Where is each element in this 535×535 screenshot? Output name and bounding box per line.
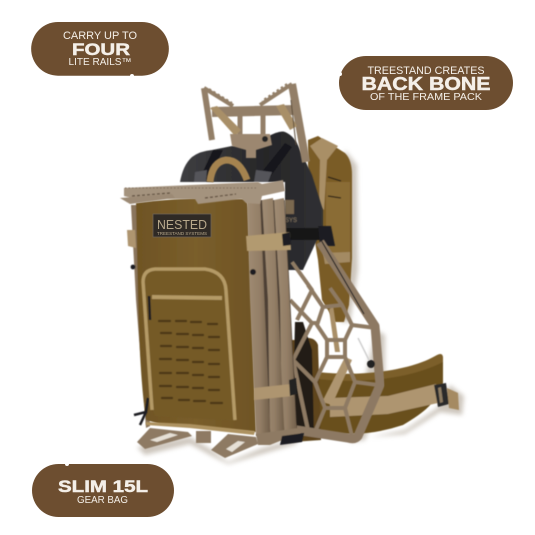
nested logo patch: NESTED <box>157 217 207 232</box>
front pocket with laser-cut panel <box>134 269 255 435</box>
nested logo patch <box>153 214 211 237</box>
callout: treestand creates back bone <box>338 56 513 110</box>
black back pad: SYS <box>285 218 297 224</box>
callout: carry up to four lite rails: CARRY UP TO <box>63 30 137 42</box>
top rail platform <box>120 180 285 204</box>
black back pad <box>180 132 335 270</box>
callout: slim 15L gear bag: GEAR BAG <box>77 495 128 506</box>
hip belt <box>315 354 459 436</box>
drop shadow <box>137 150 464 464</box>
callout: slim 15L gear bag <box>32 462 174 517</box>
callout: carry up to four lite rails: FOUR <box>72 40 130 59</box>
callout: carry up to four lite rails: LITE RAILS™ <box>68 57 132 68</box>
bottom feet <box>137 428 304 458</box>
callout: treestand creates back bone: TREESTAND CREATES <box>368 65 484 77</box>
folded lite rails <box>131 198 298 440</box>
hexagon lattice frame <box>290 240 380 442</box>
callout: carry up to four lite rails <box>31 22 169 78</box>
callout: treestand creates back bone: OF THE FRAME PACK <box>370 91 482 103</box>
callout: treestand creates back bone: BACK BONE <box>362 74 490 94</box>
nested logo patch: TREESTAND SYSTEMS <box>157 231 207 236</box>
gear bag body <box>127 198 256 432</box>
shoulder harness pad <box>308 136 352 322</box>
top frame with teeth <box>204 84 306 182</box>
lumbar pad <box>290 338 321 442</box>
callout: slim 15L gear bag: SLIM 15L <box>58 477 148 496</box>
backpack product photo <box>120 84 464 464</box>
carry handle <box>210 160 247 182</box>
